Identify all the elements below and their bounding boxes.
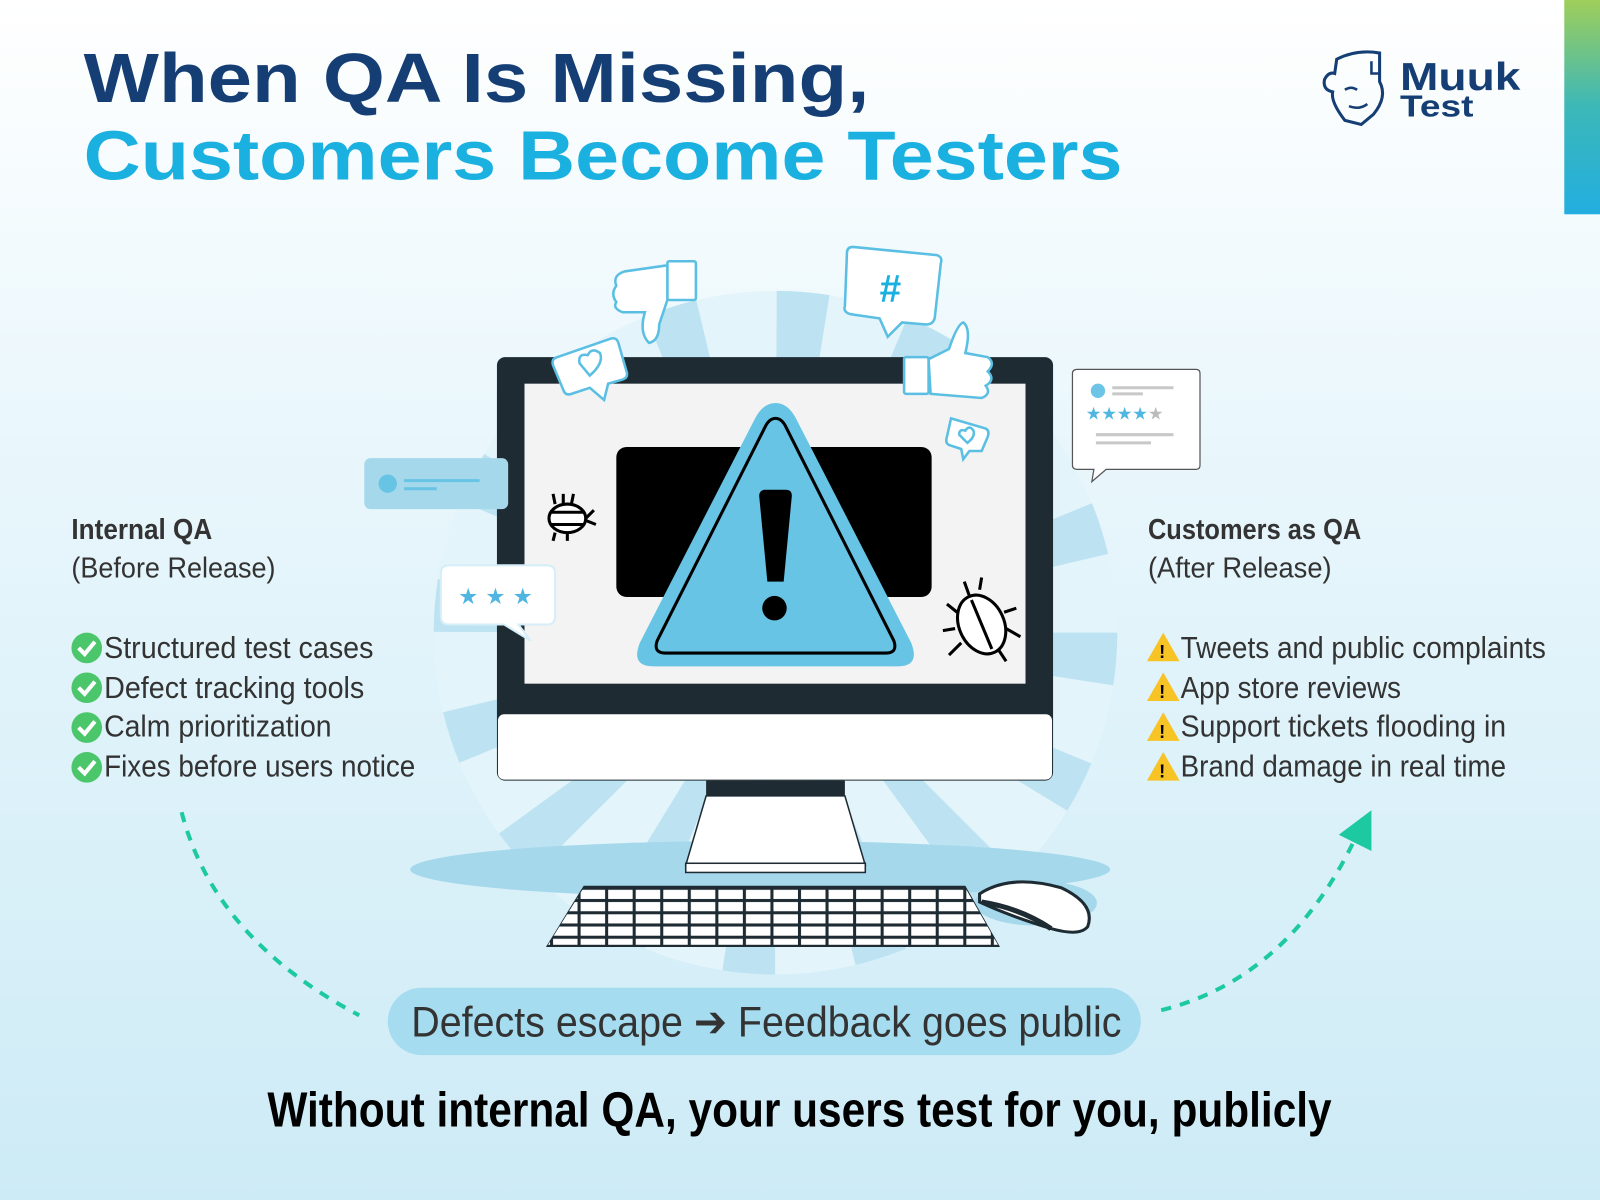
panel: customers as QA: ! xyxy=(1159,681,1165,702)
logo: MuukTest: Muuk xyxy=(1400,56,1521,99)
title: When QA Is Missing, xyxy=(84,39,869,117)
stars bubble xyxy=(441,565,555,641)
arrow: right dashed xyxy=(1161,810,1371,1010)
icon: bug right xyxy=(943,578,1020,662)
icon: thumbs down xyxy=(613,261,696,343)
panel: internal QA: (Before Release) xyxy=(71,553,276,585)
monitor xyxy=(497,357,1053,872)
panel: internal QA xyxy=(71,514,415,784)
panel: customers as QA xyxy=(1147,514,1546,784)
panel: customers as QA: Support tickets flooding in xyxy=(1181,710,1506,744)
icon: hashtag bubble xyxy=(844,247,941,337)
panel: customers as QA: ! xyxy=(1159,721,1165,742)
panel: customers as QA: (After Release) xyxy=(1148,553,1332,585)
logo: MuukTest: Test xyxy=(1400,89,1473,123)
accent bar xyxy=(1564,0,1600,214)
panel: customers as QA: ! xyxy=(1159,641,1165,662)
panel: customers as QA: App store reviews xyxy=(1181,671,1401,705)
icon: thumbs up xyxy=(904,322,992,398)
arrow: left dashed xyxy=(182,812,359,1015)
panel: internal QA: Internal QA xyxy=(71,514,212,546)
chat card left xyxy=(364,458,508,509)
stars bubble: ★★★ xyxy=(458,584,540,609)
mouse xyxy=(980,882,1089,932)
icon: small heart bubble xyxy=(946,418,988,459)
logo: MuukTest xyxy=(1324,52,1521,124)
icon: bug left xyxy=(549,494,596,541)
icon: hashtag bubble: # xyxy=(880,268,901,311)
warning triangle xyxy=(637,403,914,666)
title: Customers Become Testers xyxy=(84,117,1122,195)
base ellipse xyxy=(410,841,1110,898)
review card xyxy=(1072,369,1200,482)
review card: ★★★★★ xyxy=(1086,403,1163,423)
bottom statement: Without internal QA, your users test for you, publicly xyxy=(267,1084,1332,1138)
pill callout xyxy=(388,988,1141,1055)
panel: customers as QA: Tweets and public complaints xyxy=(1181,631,1546,665)
title xyxy=(84,39,1122,195)
panel: internal QA: Calm prioritization xyxy=(104,710,332,744)
panel: internal QA: Structured test cases xyxy=(104,631,373,665)
panel: customers as QA: Brand damage in real time xyxy=(1181,750,1506,784)
panel: internal QA: Defect tracking tools xyxy=(104,671,364,705)
sunburst background xyxy=(434,291,1117,974)
pill callout: Defects escape ➔ Feedback goes public xyxy=(411,999,1121,1047)
keyboard xyxy=(541,884,1010,949)
icon: heart bubble xyxy=(553,338,627,400)
panel: internal QA: Fixes before users notice xyxy=(104,750,415,784)
panel: customers as QA: ! xyxy=(1159,761,1165,782)
panel: customers as QA: Customers as QA xyxy=(1148,514,1361,546)
